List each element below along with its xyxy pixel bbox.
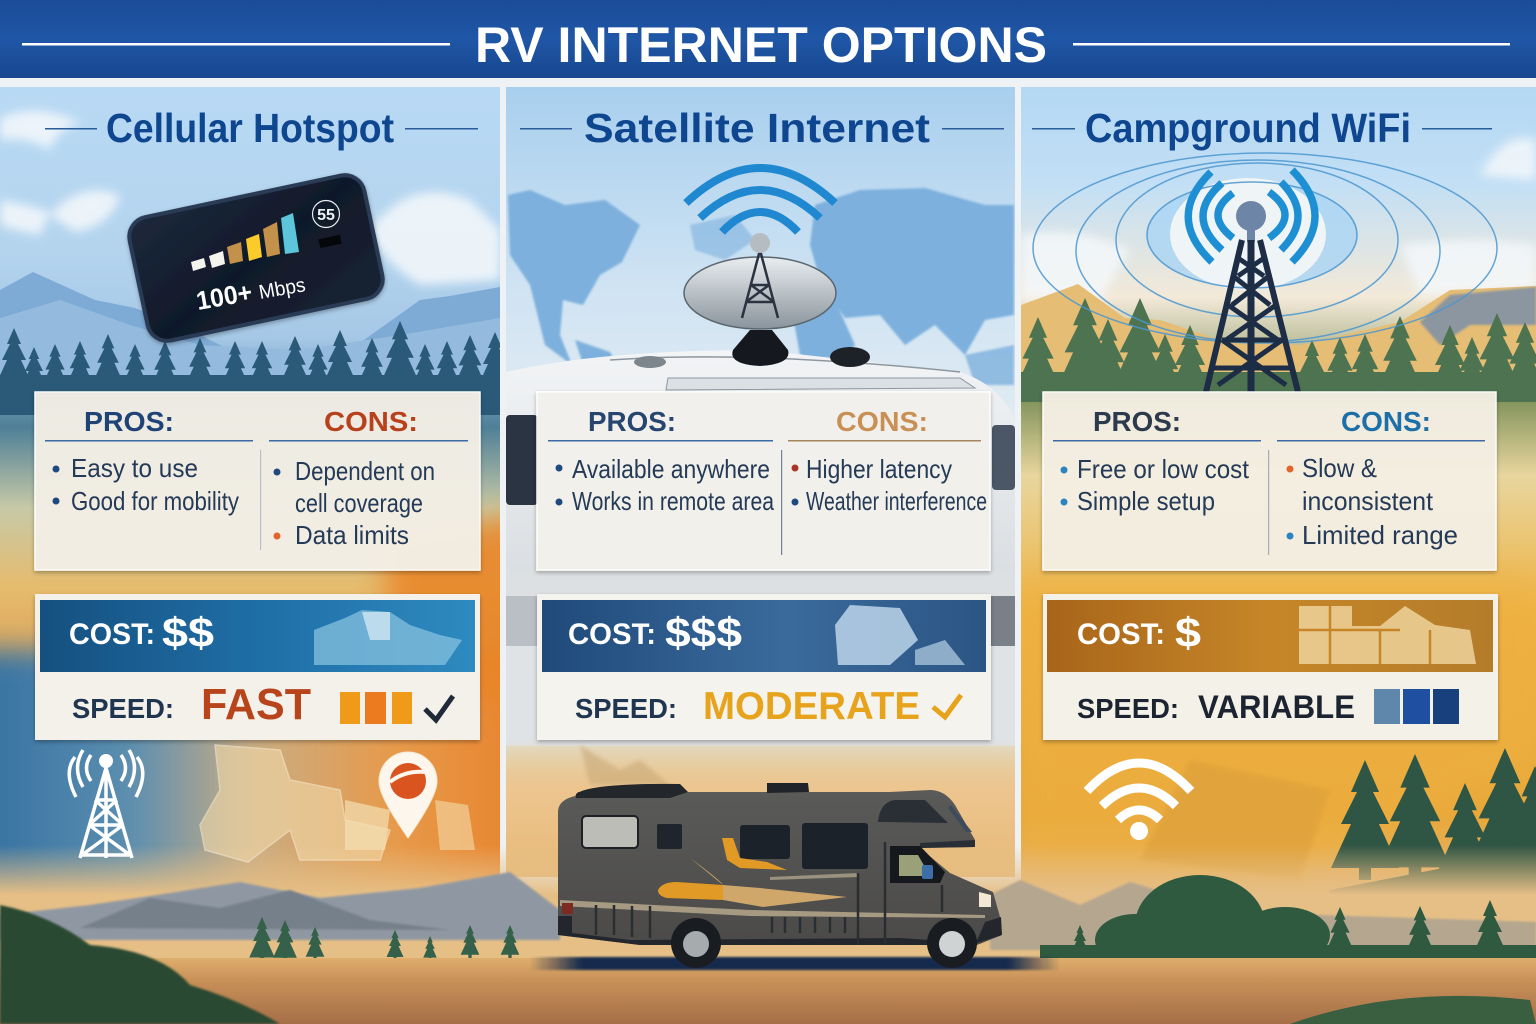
panel: cost and speed cellular: $$	[162, 609, 214, 656]
panel: pros and cons wifi: CONS:	[1341, 406, 1431, 437]
icon: check	[425, 696, 453, 720]
panel: cost and speed satellite: SPEED:	[575, 693, 677, 724]
bottom landscape	[0, 845, 1536, 1024]
icon: location pin and map	[200, 745, 475, 862]
panel: pros and cons wifi: inconsistent	[1302, 486, 1434, 516]
panel: satellite internet background	[506, 87, 1016, 880]
panel: pros and cons cellular	[35, 392, 480, 570]
van body behind panels	[506, 350, 1016, 746]
panel: pros and cons satellite	[537, 392, 990, 570]
panel: pros and cons satellite: Available anywhere	[572, 454, 770, 484]
panel: pros and cons cellular: Dependent on	[295, 456, 435, 486]
panel: pros and cons satellite: Higher latency	[806, 454, 952, 484]
wheels	[671, 918, 977, 968]
icon: satellite dish with wifi arcs	[634, 168, 870, 368]
panel: cost and speed satellite: MODERATE	[703, 685, 920, 728]
orange swoosh	[658, 838, 858, 907]
panel: pros and cons satellite: CONS:	[836, 406, 928, 437]
panel: cellular hotspot background	[0, 87, 540, 910]
title banner	[0, 0, 1536, 78]
panel: cost and speed cellular	[35, 594, 480, 740]
heading: satellite internet: Satellite Internet	[584, 105, 930, 151]
panel: cost and speed wifi: SPEED:	[1077, 693, 1179, 724]
heading: campground wifi: Campground WiFi	[1085, 105, 1411, 151]
icon: wifi symbol	[1087, 763, 1191, 840]
icon: check	[933, 695, 961, 717]
title: RV INTERNET OPTIONS	[475, 17, 1047, 73]
panel: pros and cons wifi: PROS:	[1093, 406, 1181, 437]
panel: cost and speed wifi: COST:	[1077, 618, 1165, 651]
panel: pros and cons cellular: cell coverage	[295, 488, 423, 518]
lower trim	[560, 900, 985, 918]
panel: cost and speed satellite	[537, 594, 991, 740]
panel: pros and cons cellular: Data limits	[295, 520, 409, 550]
badge: 55	[317, 207, 335, 224]
panel: cost and speed wifi	[1043, 594, 1498, 740]
panel: pros and cons cellular: Good for mobility	[71, 486, 239, 516]
panel: cost and speed satellite: $$$	[665, 609, 742, 656]
heading: cellular hotspot: Cellular Hotspot	[106, 105, 394, 151]
panel: pros and cons cellular: CONS:	[324, 406, 418, 437]
panel: pros and cons satellite: Works in remote area	[572, 486, 774, 516]
panel: pros and cons satellite: Weather interference	[806, 486, 987, 516]
speed label: 100+ Mbps	[194, 267, 307, 316]
icon: cell tower small	[69, 750, 143, 858]
panel: cost and speed cellular: SPEED:	[72, 693, 174, 724]
panel: cost and speed wifi: $	[1175, 609, 1201, 656]
panel: pros and cons wifi: Limited range	[1302, 520, 1458, 550]
windows	[582, 816, 945, 883]
panel: cost and speed cellular: FAST	[201, 680, 311, 729]
icon: radio tower with rings	[1033, 153, 1497, 392]
icon: hotspot device	[126, 171, 386, 345]
panel: campground wifi background	[1016, 87, 1536, 920]
badge	[312, 200, 342, 248]
illustration: motorhome	[558, 783, 1002, 968]
panel: cost and speed wifi: VARIABLE	[1198, 689, 1355, 725]
world map	[508, 188, 1014, 392]
panel: pros and cons wifi: Simple setup	[1077, 486, 1215, 516]
panel: pros and cons cellular: Easy to use	[71, 453, 198, 483]
panel: pros and cons wifi: Free or low cost	[1077, 454, 1250, 484]
panel: pros and cons wifi	[1043, 392, 1496, 570]
panel: pros and cons cellular: PROS:	[84, 406, 174, 437]
panel: pros and cons wifi: Slow &	[1302, 453, 1377, 483]
signal bars	[191, 213, 299, 271]
panel: pros and cons satellite: PROS:	[588, 406, 676, 437]
panel: cost and speed cellular: COST:	[69, 618, 155, 651]
panel: cost and speed satellite: COST:	[568, 618, 656, 651]
